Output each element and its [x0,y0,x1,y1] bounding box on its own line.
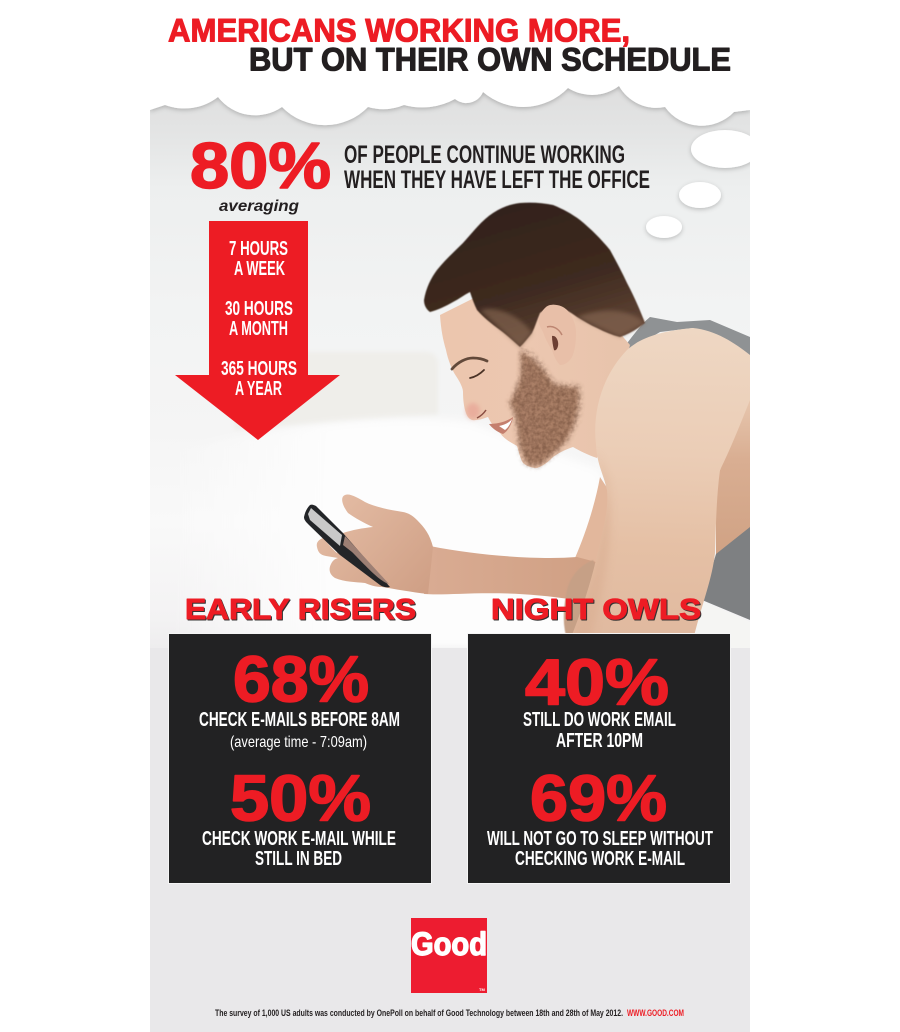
stat 69%: 69% [530,762,667,834]
panel: night owls [468,634,730,884]
hours per week: A WEEK [234,258,285,280]
footer: survey note: WWW.GOOD.COM [627,1008,684,1018]
photo: white bed [264,423,565,648]
photo: grey shirt side [606,484,607,486]
footer: survey note: The survey of 1,000 US adults was conducted by OnePoll on behalf of Good Technology between 18th and 28th of May 2012. [215,1008,623,1018]
text: check work e-mail while still in bed: CHECK WORK E-MAIL WHILE [202,828,396,850]
photo: arm shading [579,481,610,633]
text: will not go to sleep without checking work e-mail [487,828,713,870]
text: still do work email after 10pm: STILL DO WORK EMAIL [523,709,676,731]
photo: ear [542,304,569,350]
text: check e-mails before 8am: CHECK E-MAILS BEFORE 8AM [199,709,400,731]
photo: phone [304,505,390,587]
text: of people continue working: WHEN THEY HAVE LEFT THE OFFICE [344,166,650,194]
hours per year: A YEAR [235,378,282,400]
photo: grey shirt strap [620,317,750,356]
heading: early risers: EARLY RISERS [186,595,417,627]
photo: bed right [680,600,750,648]
arrow with hours [175,221,340,440]
hours per year: 365 HOURS [221,358,297,380]
photo: forearm [424,546,596,600]
thought bubbles [646,130,759,238]
logo: Good: Good [411,926,487,962]
photo: shoulder and upper arm [572,328,750,633]
text: check e-mails before 8am: (average time - 7:09am) [230,734,367,751]
photo: beard base [510,352,578,466]
title line 1: AMERICANS WORKING MORE, [168,12,630,48]
text: will not go to sleep without checking work e-mail: WILL NOT GO TO SLEEP WITHOUT [487,828,713,850]
photo: hair [424,203,645,347]
text: of people continue working [344,141,650,194]
photo: nose shading [466,403,486,419]
headline statistic 80%: 80% [190,129,331,202]
heading: early risers: EARLY RISERS [185,594,416,626]
photo: far hand [563,560,595,633]
photo: hair fade [480,309,645,347]
heading: night owls: NIGHT OWLS [491,594,701,626]
text: still do work email after 10pm: AFTER 10PM [556,730,643,752]
hours per month: A MONTH [229,318,288,340]
heading: night owls: NIGHT OWLS [492,595,702,627]
hours per week: 7 HOURS [229,238,288,260]
hours per month: 30 HOURS [225,298,293,320]
text: check work e-mail while still in bed: STILL IN BED [255,848,342,870]
logo: Good: TM [479,987,485,992]
stat 68%: 68% [233,642,369,716]
hours per week [229,238,288,280]
photo: man in bed using smartphone [236,202,750,648]
text: still do work email after 10pm [523,709,676,752]
panel: grey background [150,80,750,1032]
title [168,12,731,78]
panel: early risers [168,634,432,884]
text: will not go to sleep without checking work e-mail: CHECKING WORK E-MAIL [515,848,685,870]
photo: grey shirt lower [702,527,750,620]
title line 2: BUT ON THEIR OWN SCHEDULE [249,42,731,78]
bubble medium [679,182,721,208]
stat 50%: 50% [230,762,371,834]
photo: neck and face [440,285,630,468]
text: check e-mails before 8am [199,709,400,751]
photo: torso skin [716,395,750,556]
photo: beard stubble [508,347,582,468]
photo: far arm [576,477,608,564]
text: check work e-mail while still in bed [202,828,396,870]
photo: hand [317,495,433,594]
cloud: thought cloud header [150,80,750,130]
photo: eye and brow [452,358,487,378]
hours per year [221,358,297,400]
photo: headboard [228,352,438,430]
logo: Good [411,918,487,993]
bubble large [691,130,759,168]
bubble small [646,216,682,238]
stat 40%: 40% [525,646,669,718]
photo: mouth [489,417,513,434]
text: averaging: averaging [219,198,299,215]
hours per month [225,298,293,340]
text: of people continue working: OF PEOPLE CONTINUE WORKING [344,141,625,169]
red down arrow [175,221,340,440]
